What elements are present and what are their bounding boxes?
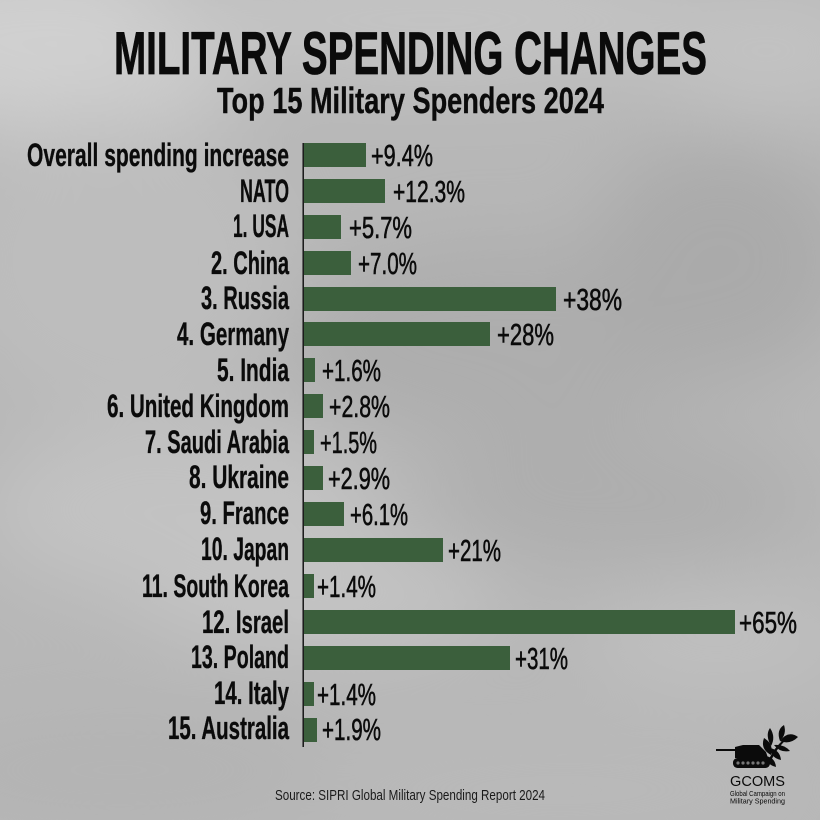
row: USA: 1. USA — [233, 208, 289, 244]
row: Germany: +28% — [497, 317, 554, 352]
row: Israel: 12. Israel — [202, 604, 289, 640]
row: Russia — [201, 280, 622, 317]
row: Russia: 3. Russia — [201, 280, 289, 316]
row: Israel: +65% — [739, 605, 797, 640]
logo tagline line 1: Global Campaign on — [730, 789, 785, 798]
bar chart — [27, 137, 797, 747]
logo tagline line 2: Military Spending — [730, 796, 785, 806]
row: Australia: +1.9% — [322, 712, 381, 747]
row: Overall spending increase: Overall spending increase — [27, 137, 289, 173]
row: China: +7.0% — [358, 246, 417, 281]
row: Italy: +1.4% — [317, 677, 376, 712]
row: South Korea: 11. South Korea — [142, 568, 289, 604]
row: Poland — [191, 639, 568, 676]
row: Germany: 4. Germany — [177, 316, 289, 352]
subtitle: Top 15 Military Spenders 2024 — [217, 80, 604, 121]
row: NATO — [240, 173, 465, 209]
row: USA: +5.7% — [349, 210, 412, 245]
row: United Kingdom: 6. United Kingdom — [107, 388, 289, 424]
axis line — [302, 143, 304, 747]
row: China — [211, 245, 417, 281]
row: Poland: +31% — [515, 641, 568, 676]
row: Ukraine: +2.9% — [328, 461, 390, 496]
source note: Source: SIPRI Global Military Spending Report 2024 — [275, 787, 545, 804]
logo wordmark: GCOMS — [730, 774, 785, 790]
row: Saudi Arabia: 7. Saudi Arabia — [145, 424, 289, 460]
row: Israel — [202, 604, 797, 640]
row: USA — [233, 208, 412, 245]
row: Saudi Arabia: +1.5% — [320, 425, 377, 460]
logo: GCOMS — [716, 725, 798, 806]
row: Australia: 15. Australia — [168, 710, 289, 746]
row: France: +6.1% — [350, 497, 408, 532]
row: France: 9. France — [200, 495, 289, 531]
row: China: 2. China — [211, 245, 289, 281]
row: Overall spending increase: +9.4% — [371, 138, 433, 173]
row: India: +1.6% — [322, 353, 381, 388]
row: Italy: 14. Italy — [214, 675, 289, 711]
row: Japan: 10. Japan — [201, 531, 289, 567]
row: Ukraine: 8. Ukraine — [189, 459, 289, 495]
row: NATO: +12.3% — [393, 174, 465, 209]
row: United Kingdom: +2.8% — [329, 389, 390, 424]
row: NATO: NATO — [240, 173, 289, 209]
row: Japan: +21% — [448, 533, 501, 568]
row: India: 5. India — [217, 352, 289, 388]
row: Japan — [201, 531, 501, 568]
icon: olive branch — [763, 725, 798, 767]
row: South Korea: +1.4% — [317, 569, 376, 604]
row: Poland: 13. Poland — [191, 639, 289, 675]
icon: tank — [716, 745, 770, 768]
row: Germany — [177, 316, 554, 352]
row: India — [217, 352, 381, 388]
row: Russia: +38% — [563, 282, 622, 317]
row: France — [200, 495, 408, 532]
